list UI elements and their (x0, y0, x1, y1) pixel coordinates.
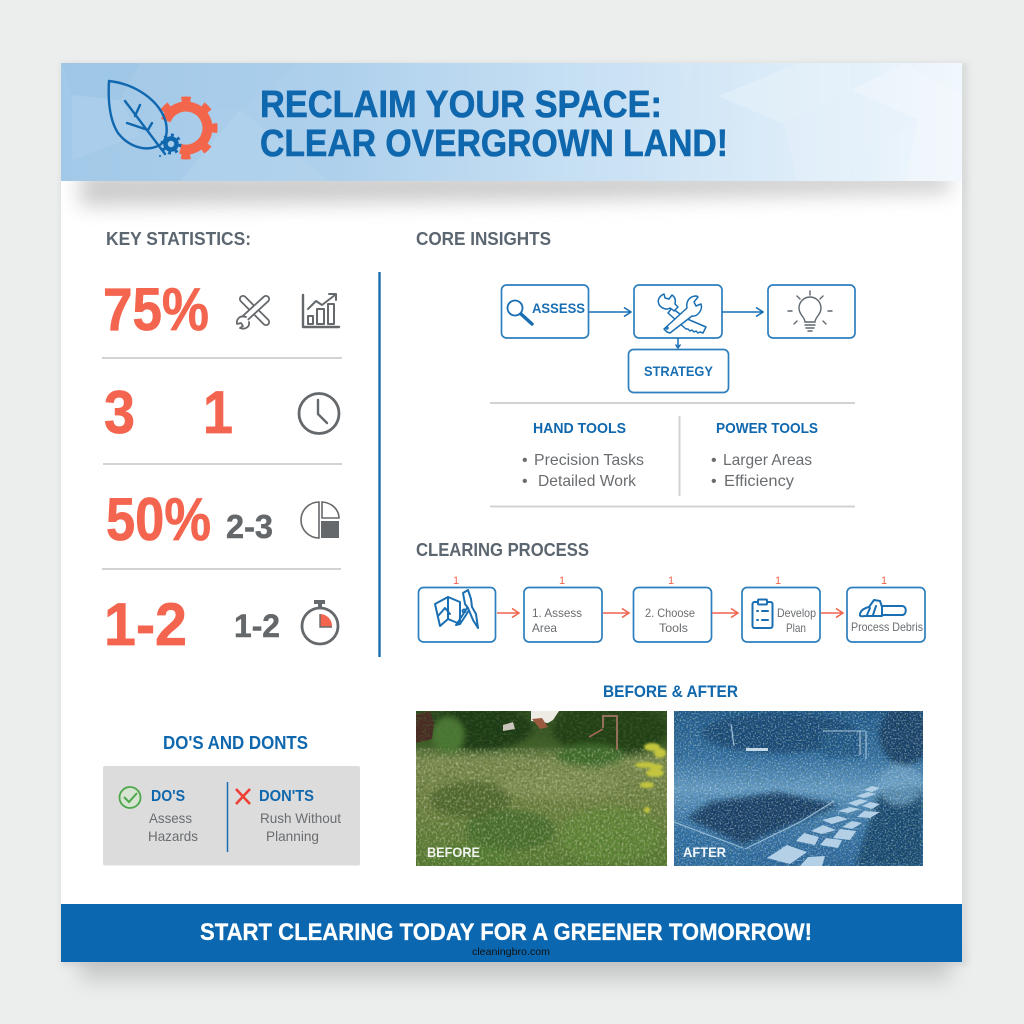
footer banner: START CLEARING TODAY FOR A GREENER TOMORROW! (200, 919, 812, 946)
step: assess area: 1. Assess (532, 606, 582, 620)
stat: 50%: 50% (106, 486, 211, 553)
stat: 1-2 secondary: 1-2 (234, 608, 280, 644)
step: develop plan: Develop (777, 606, 816, 620)
box: assess (502, 285, 588, 338)
step: choose tools (634, 588, 712, 642)
do's column (120, 787, 198, 844)
footer banner (61, 904, 962, 962)
don'ts column: Planning (266, 828, 319, 844)
arrow: down (676, 338, 680, 348)
power tools: POWER TOOLS (716, 420, 818, 437)
photo: before (416, 704, 668, 866)
power tools: • (711, 452, 717, 469)
label: after: AFTER (683, 844, 726, 860)
heading: key statistics: KEY STATISTICS: (106, 229, 251, 249)
do's column: Hazards (148, 828, 198, 844)
panel: key statistics (102, 229, 342, 658)
arrow (603, 612, 629, 614)
icon: clock (299, 394, 339, 434)
box: assess: ASSESS (532, 300, 585, 316)
panel: before and after (416, 682, 931, 866)
title: RECLAIM YOUR SPACE: (260, 84, 662, 126)
icon: crossed tools (237, 299, 266, 329)
power tools: Larger Areas (723, 452, 812, 469)
title (260, 84, 728, 165)
icon: pie chart (301, 502, 339, 538)
hand tools: • (522, 473, 528, 490)
vertical divider (378, 272, 381, 657)
step: develop plan (742, 588, 820, 642)
page card (61, 63, 962, 962)
stat: 3 and 1: 3 (104, 379, 135, 446)
don'ts column: Rush Without (260, 810, 341, 826)
box: lightbulb (768, 285, 855, 338)
step numbers: 1 (559, 575, 565, 587)
power tools (711, 420, 818, 490)
step: develop plan: Plan (786, 621, 806, 635)
step: process debris: Process Debris (851, 620, 923, 634)
photo: after (674, 705, 931, 866)
power tools: • (711, 473, 717, 490)
step numbers: 1 (881, 575, 887, 587)
stat: 1-2: 1-2 (104, 591, 187, 658)
hand tools: • (522, 452, 528, 469)
title: CLEAR OVERGROWN LAND! (260, 123, 728, 165)
step numbers: 1 (668, 575, 674, 587)
hand tools: Detailed Work (538, 473, 637, 490)
hand tools: HAND TOOLS (533, 420, 626, 437)
box: strategy: STRATEGY (644, 363, 714, 379)
step: choose tools: 2. Choose (645, 606, 695, 620)
hand tools: Precision Tasks (534, 452, 644, 469)
header banner (61, 63, 962, 181)
icon: leaf and gear (109, 81, 214, 157)
step: assess area (524, 588, 602, 642)
stat: 3 and 1: 1 (203, 379, 233, 446)
card shadow (61, 63, 968, 980)
footer banner: cleaningbro.com (472, 946, 550, 958)
arrow (712, 612, 738, 614)
don'ts column: DON'TS (259, 788, 314, 805)
header shadow (80, 172, 950, 206)
heading: do's and donts: DO'S AND DONTS (163, 733, 308, 753)
hand tools (522, 420, 644, 490)
do's column: Assess (149, 810, 192, 826)
heading: core insights: CORE INSIGHTS (416, 229, 551, 249)
arrow (589, 311, 631, 313)
power tools: Efficiency (724, 473, 794, 490)
stat: 3 and 1 (104, 379, 233, 446)
don'ts column (236, 788, 341, 844)
icon: bar chart (303, 294, 339, 327)
arrow (722, 311, 763, 313)
heading: clearing process: CLEARING PROCESS (416, 540, 589, 560)
arrow (497, 612, 519, 614)
panel: clearing process (416, 540, 925, 642)
grey card (103, 766, 360, 866)
stat: 75%: 75% (103, 276, 209, 343)
box: tools (634, 285, 722, 338)
step numbers: 1 (775, 575, 781, 587)
step: choose tools: Tools (659, 621, 688, 635)
step: process debris (847, 588, 925, 642)
step: assess area: Area (532, 621, 557, 635)
step: map and pruners (418, 588, 496, 642)
heading: before and after: BEFORE & AFTER (603, 682, 738, 701)
label: before: BEFORE (427, 844, 480, 860)
panel: do's and don'ts (103, 733, 360, 866)
do's column: DO'S (151, 788, 185, 805)
panel: core insights (416, 229, 855, 506)
icon: stopwatch (302, 600, 338, 644)
step numbers (453, 575, 887, 587)
arrow (821, 612, 843, 614)
stat: 2-3: 2-3 (226, 508, 273, 545)
box: strategy (628, 350, 728, 392)
step numbers: 1 (453, 575, 459, 587)
